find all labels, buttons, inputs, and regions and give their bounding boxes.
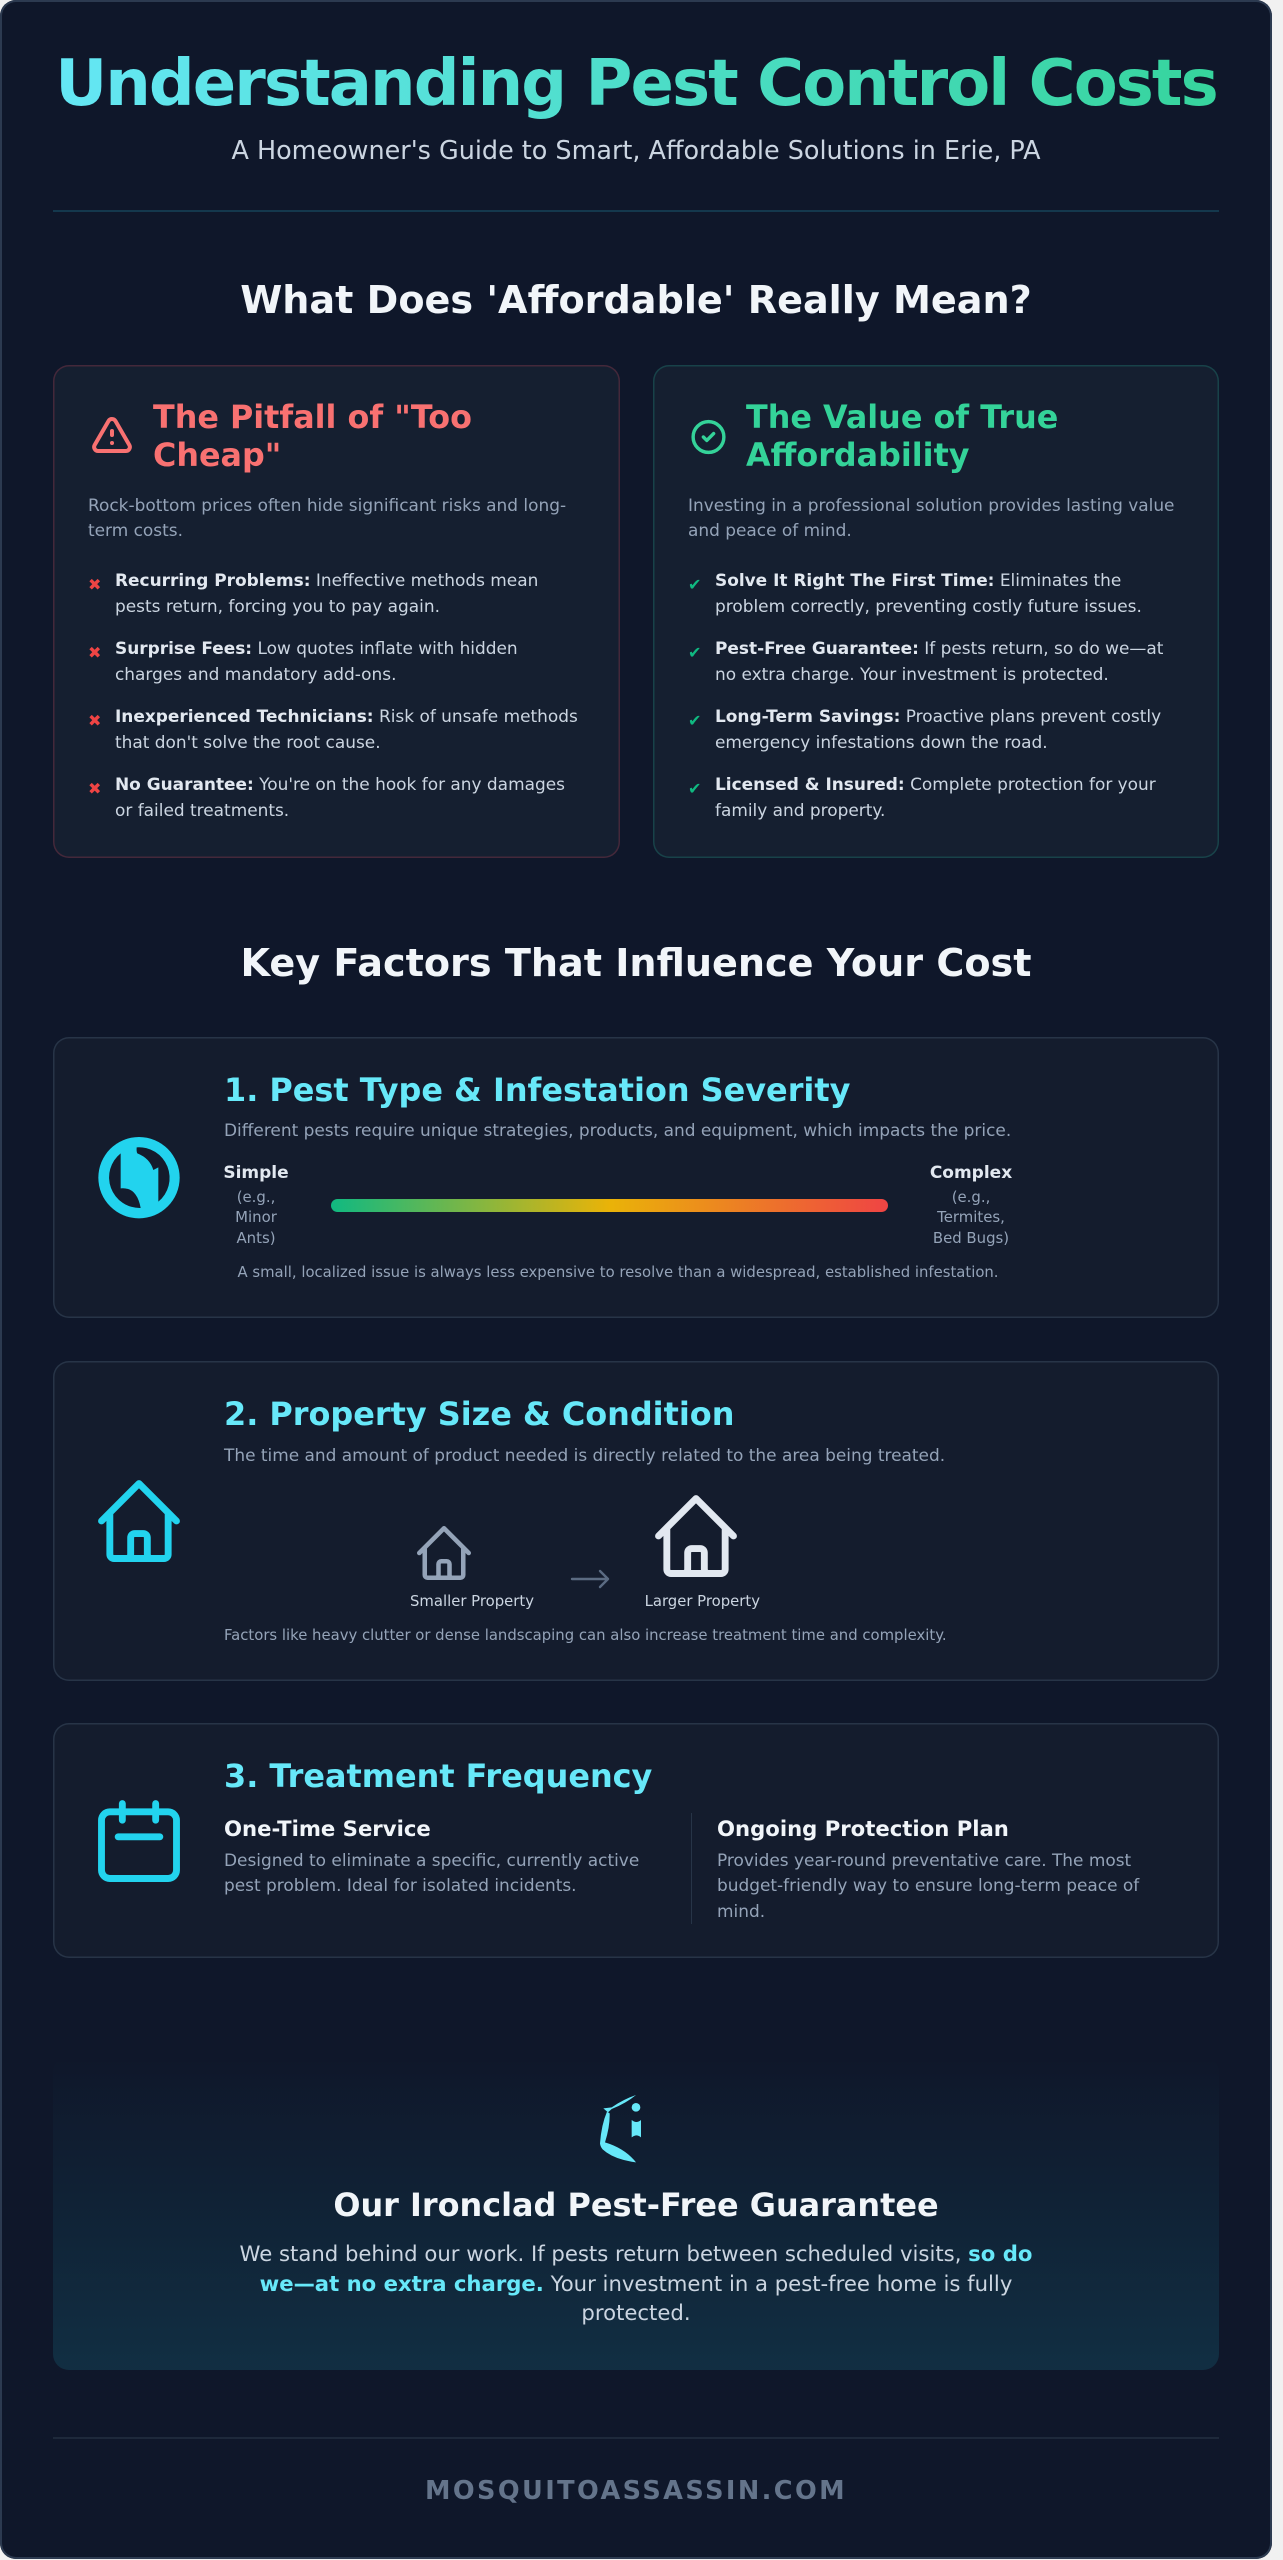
icon: check circle [691, 420, 726, 454]
list: true affordability benefits: Solve It Right The First Time: Eliminates the [715, 570, 1121, 590]
icon: calendar [98, 1800, 180, 1882]
scale label: complex: (e.g., [952, 1188, 990, 1206]
panel intro: too cheap: Rock-bottom prices often hide significant risks and long- [88, 494, 566, 514]
icon: warning triangle [92, 417, 132, 453]
footer url: MOSQUITOASSASSIN.COM [425, 2476, 847, 2506]
panel: factor 2 property size [53, 1361, 1219, 1681]
scale label: complex [930, 1163, 1012, 1247]
panel intro: true affordability [688, 494, 1174, 540]
factor title: 3. Treatment Frequency [224, 1757, 652, 1795]
panel: factor 3 treatment frequency [53, 1723, 1219, 1958]
list: true affordability benefits: ✔ [688, 643, 701, 662]
panel: too cheap [53, 365, 620, 858]
column: ongoing protection plan: mind. [717, 1901, 765, 1921]
icon: small house [417, 1526, 471, 1580]
list: true affordability benefits: ✔ [688, 575, 701, 594]
list: too cheap risks: Recurring Problems: Ineffective methods mean [115, 570, 538, 590]
section heading: key factors: Key Factors That Influence Your Cost [241, 941, 1031, 985]
column: one-time service: pest problem. Ideal for isolated incidents. [224, 1875, 577, 1895]
list: true affordability benefits: no extra charge. Your investment is protected. [715, 664, 1109, 684]
list: true affordability benefits: Pest-Free Guarantee: If pests return, so do we—at [715, 638, 1163, 658]
list: too cheap risks: charges and mandatory add-ons. [115, 664, 396, 684]
list: true affordability benefits: problem correctly, preventing costly future issues. [715, 596, 1142, 616]
list: true affordability benefits: Licensed & Insured: Complete protection for your [715, 774, 1156, 794]
guarantee text: protected. [581, 2300, 691, 2325]
factor title: 2. Property Size & Condition [224, 1394, 734, 1432]
panel heading: too cheap: Cheap" [153, 437, 281, 474]
guarantee heading: Our Ironclad Pest-Free Guarantee [333, 2186, 939, 2224]
column: ongoing protection plan: budget-friendly way to ensure long-term peace of [717, 1875, 1139, 1895]
panel heading: true affordability [746, 399, 1058, 474]
severity gradient bar [331, 1199, 888, 1212]
panel intro: too cheap: term costs. [88, 520, 183, 540]
factor note: Factors like heavy clutter or dense landscaping can also increase treatment time and complexity. [224, 1626, 947, 1644]
panel heading: true affordability: Affordability [746, 437, 970, 474]
icon: large house [655, 1495, 737, 1577]
section heading: affordable: What Does 'Affordable' Really Mean? [240, 278, 1032, 322]
label: smaller property: Smaller Property [410, 1592, 534, 1610]
list: too cheap risks: No Guarantee: You're on the hook for any damages [115, 774, 565, 794]
title: Understanding Pest Control Costs [55, 47, 1217, 121]
column: one-time service: One-Time Service [224, 1816, 431, 1841]
factor description: The time and amount of product needed is directly related to the area being treated. [224, 1445, 945, 1465]
list: too cheap risks: pests return, forcing you to pay again. [115, 596, 440, 616]
panel heading: too cheap: The Pitfall of "Too [153, 399, 472, 436]
list: too cheap risks: Inexperienced Technicians: Risk of unsafe methods [115, 706, 578, 726]
guarantee text: we—at no extra charge. Your investment in a pest-free home is fully [260, 2270, 1012, 2296]
list: too cheap risks: ✖ [88, 711, 101, 730]
arrow [570, 1570, 610, 1588]
column: one-time service [224, 1816, 639, 1895]
column: ongoing protection plan: Provides year-round preventative care. The most [717, 1850, 1131, 1870]
list: true affordability benefits: ✔ [688, 711, 701, 730]
panel heading: too cheap [153, 399, 472, 474]
panel intro: too cheap [88, 494, 566, 540]
list: true affordability benefits [688, 570, 1163, 820]
panel intro: true affordability: Investing in a professional solution provides lasting value [688, 494, 1174, 514]
icon: house [98, 1480, 180, 1562]
guarantee text: We stand behind our work. If pests return between scheduled visits, so do [240, 2241, 1032, 2266]
list: too cheap risks: ✖ [88, 779, 101, 798]
list: too cheap risks: ✖ [88, 643, 101, 662]
column: ongoing protection plan: Ongoing Protection Plan [717, 1816, 1009, 1841]
panel heading: true affordability: The Value of True [746, 399, 1058, 436]
guarantee text [240, 2241, 1032, 2325]
list: true affordability benefits: emergency infestations down the road. [715, 732, 1048, 752]
scale label: complex: Termites, [937, 1208, 1005, 1226]
icon: shield fragment [600, 2095, 641, 2162]
list: too cheap risks [88, 570, 578, 820]
list: too cheap risks: or failed treatments. [115, 800, 289, 820]
panel: factor 1 pest type [53, 1037, 1219, 1318]
list: true affordability benefits: family and property. [715, 800, 885, 820]
list: too cheap risks: ✖ [88, 575, 101, 594]
factor note: A small, localized issue is always less expensive to resolve than a widespread, established infestation. [237, 1263, 999, 1281]
panel: true affordability [653, 365, 1219, 858]
scale label: complex: Complex [930, 1163, 1012, 1183]
list: too cheap risks: Surprise Fees: Low quotes inflate with hidden [115, 638, 518, 658]
column: one-time service: Designed to eliminate a specific, currently active [224, 1850, 639, 1870]
scale label: simple: Minor [235, 1208, 277, 1226]
scale label: simple [223, 1163, 289, 1247]
panel: guarantee [53, 2056, 1219, 2370]
list: true affordability benefits: ✔ [688, 779, 701, 798]
factor description: Different pests require unique strategies, products, and equipment, which impacts the price. [224, 1120, 1011, 1140]
subtitle: A Homeowner's Guide to Smart, Affordable Solutions in Erie, PA [231, 136, 1041, 166]
panel intro: true affordability: and peace of mind. [688, 520, 852, 540]
list: true affordability benefits: Long-Term Savings: Proactive plans prevent costly [715, 706, 1161, 726]
list: too cheap risks: that don't solve the root cause. [115, 732, 381, 752]
scale label: complex: Bed Bugs) [933, 1229, 1009, 1247]
label: larger property: Larger Property [645, 1592, 760, 1610]
scale label: simple: Ants) [236, 1229, 276, 1247]
factor title: 1. Pest Type & Infestation Severity [224, 1070, 850, 1108]
icon: pest circle [98, 1137, 180, 1218]
scale label: simple: Simple [223, 1163, 289, 1183]
column: ongoing protection plan [717, 1816, 1140, 1921]
scale label: simple: (e.g., [237, 1188, 275, 1206]
